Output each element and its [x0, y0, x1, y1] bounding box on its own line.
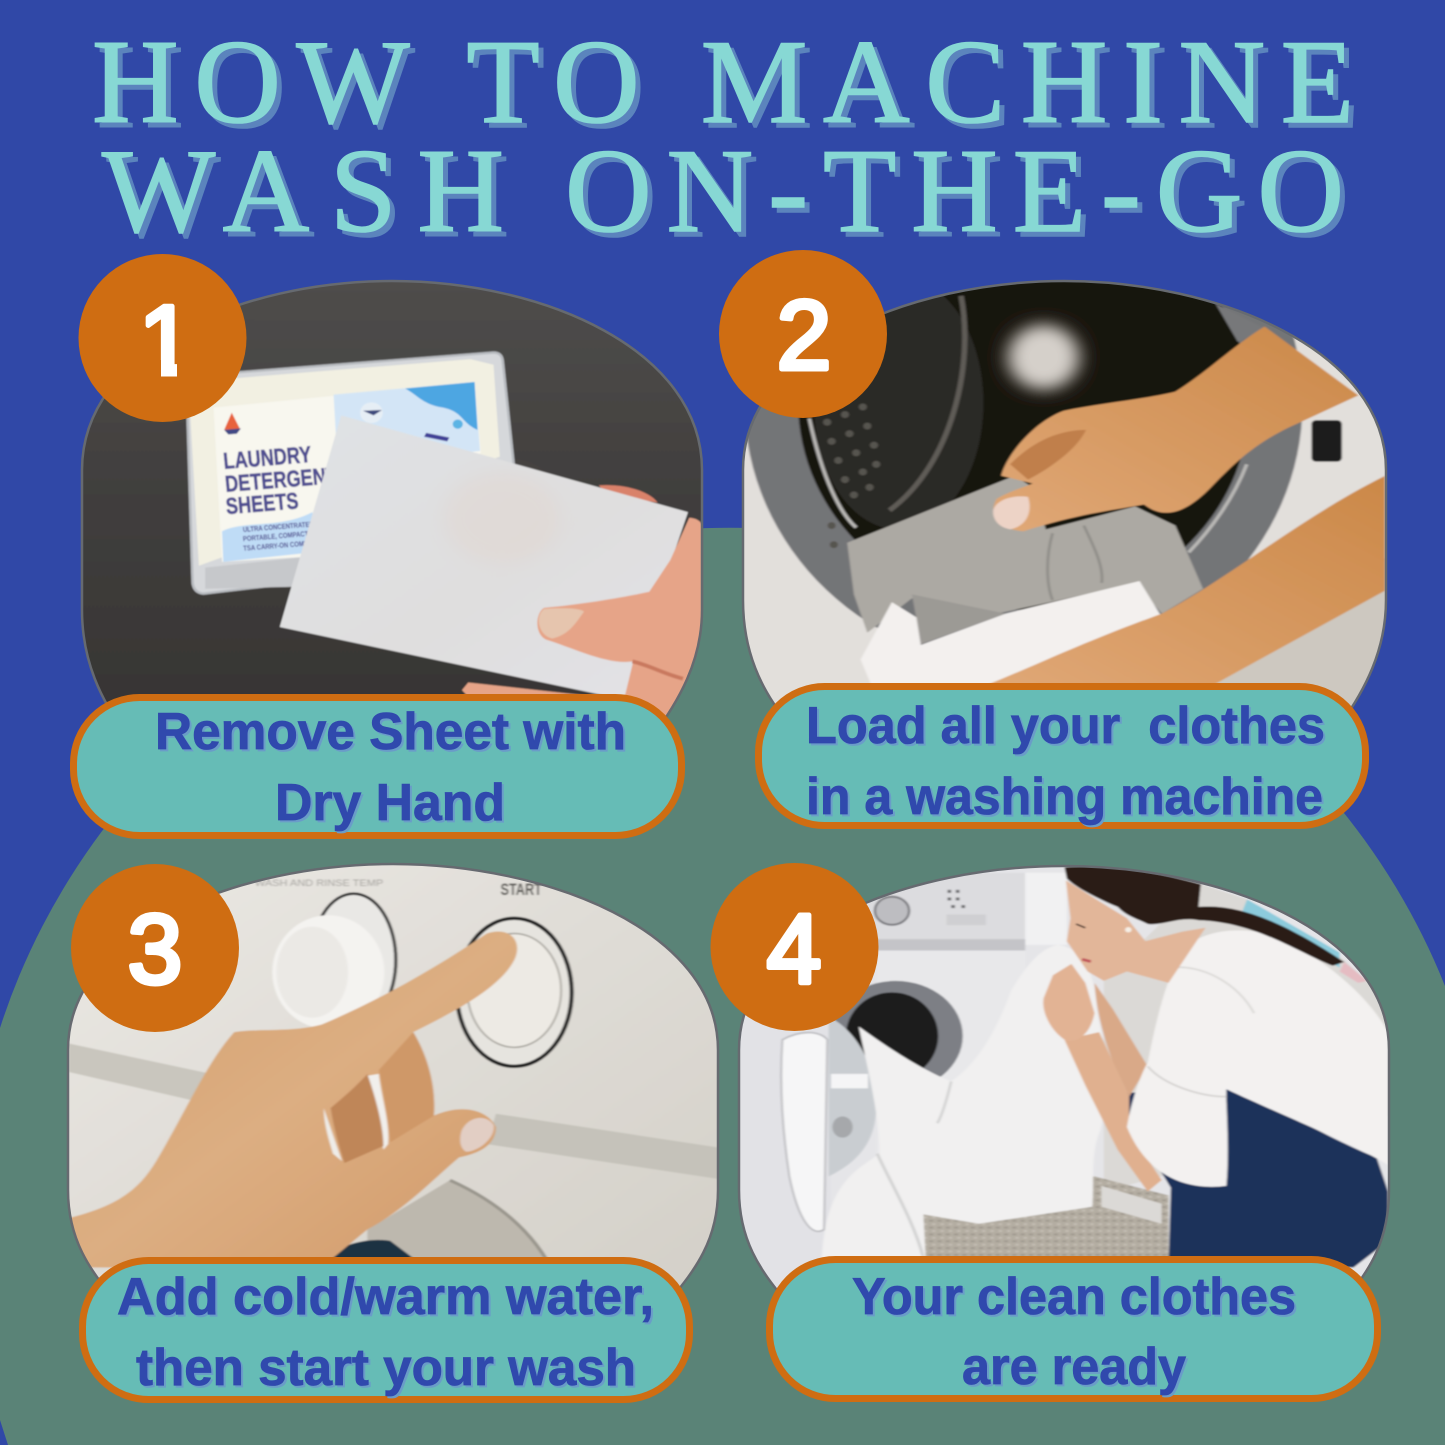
detergent sheet: [280, 415, 688, 700]
panel: step 2: [719, 250, 1388, 829]
number badge 1: [78, 254, 246, 422]
photo: loading clothes into washer: [744, 282, 1385, 706]
lower arm: [983, 476, 1385, 686]
caption 4: [770, 1260, 1378, 1398]
drum perforations: [823, 403, 880, 548]
upper hand and arm: [993, 327, 1358, 531]
title: HOW TO MACHINE: [92, 15, 1354, 148]
woman's hair: [1064, 866, 1344, 966]
number badge 4: [710, 863, 878, 1031]
photo: finger pressing start dial: [69, 865, 717, 1286]
photo frame: [739, 866, 1389, 1300]
left machine and open door: [738, 1013, 831, 1290]
title: ON-THE-GO: [565, 124, 1344, 257]
title: WASH: [102, 124, 504, 257]
woman's jeans: [1127, 1089, 1388, 1267]
caption 1: [74, 698, 682, 836]
panel: step 3: [66, 862, 720, 1403]
grey cloth: [847, 476, 1203, 633]
number badge 1: 1: [139, 285, 193, 395]
caption 1: Remove Sheet with: [155, 703, 626, 761]
box label text: [222, 445, 327, 552]
photo: detergent sheet held over box: [83, 282, 701, 716]
washer: [870, 874, 1024, 938]
caption 1: Dry Hand: [275, 774, 505, 832]
caption 3: Add cold/warm water,: [117, 1268, 654, 1326]
woman's near arm: [1064, 1032, 1162, 1192]
woman's shirt: [1127, 930, 1388, 1187]
panel labels: START: [501, 879, 542, 898]
hand: [462, 518, 706, 732]
caption 4: are ready: [962, 1338, 1186, 1396]
photo: woman smelling clean laundry: [740, 867, 1388, 1288]
box label text: DETERGENT: [224, 463, 338, 497]
white cloth: [861, 581, 1162, 686]
box label text: TSA CARRY-ON COMPLIANT: [243, 539, 326, 553]
number badge 3: 3: [128, 894, 182, 1004]
box label text: SHEETS: [225, 488, 300, 520]
number badge 3: [71, 864, 239, 1032]
caption 3: then start your wash: [136, 1339, 636, 1397]
left dial: [272, 894, 396, 1029]
towel: [822, 945, 1107, 1260]
logo on box: [224, 413, 241, 434]
title: [92, 15, 1354, 257]
caption 4: Your clean clothes: [852, 1268, 1296, 1326]
caption 3: [82, 1260, 690, 1400]
number badge 2: [719, 250, 887, 418]
panel labels: WASH AND RINSE TEMP: [255, 879, 384, 889]
number badge 4: 4: [767, 894, 821, 1004]
box label text: ULTRA CONCENTRATED: [243, 521, 314, 534]
basket: [922, 1176, 1170, 1256]
box label text: PORTABLE, COMPACT: [243, 531, 309, 543]
caption 2: [758, 686, 1366, 826]
photo frame: [82, 281, 702, 740]
woman's far arm: [1095, 983, 1148, 1097]
panel: step 1: [60, 250, 720, 836]
caption 2: Load all your clothes: [806, 697, 1325, 755]
smart device on machine: [1311, 420, 1342, 462]
woman's face: [1066, 880, 1206, 983]
door arc: [366, 1180, 544, 1257]
photo frame: [68, 864, 718, 1300]
box label text: LAUNDRY: [222, 442, 313, 474]
wall and backdrop: [1104, 884, 1390, 1192]
photo frame: [743, 281, 1386, 725]
panel labels: [255, 879, 542, 896]
woman's hand: [1043, 964, 1095, 1041]
number badge 2: 2: [777, 280, 831, 390]
hand: [69, 931, 517, 1267]
start dial: [457, 918, 572, 1066]
green arch background shape: [0, 528, 1445, 1445]
panel: step 4: [710, 850, 1445, 1398]
caption 2: in a washing machine: [806, 768, 1323, 826]
